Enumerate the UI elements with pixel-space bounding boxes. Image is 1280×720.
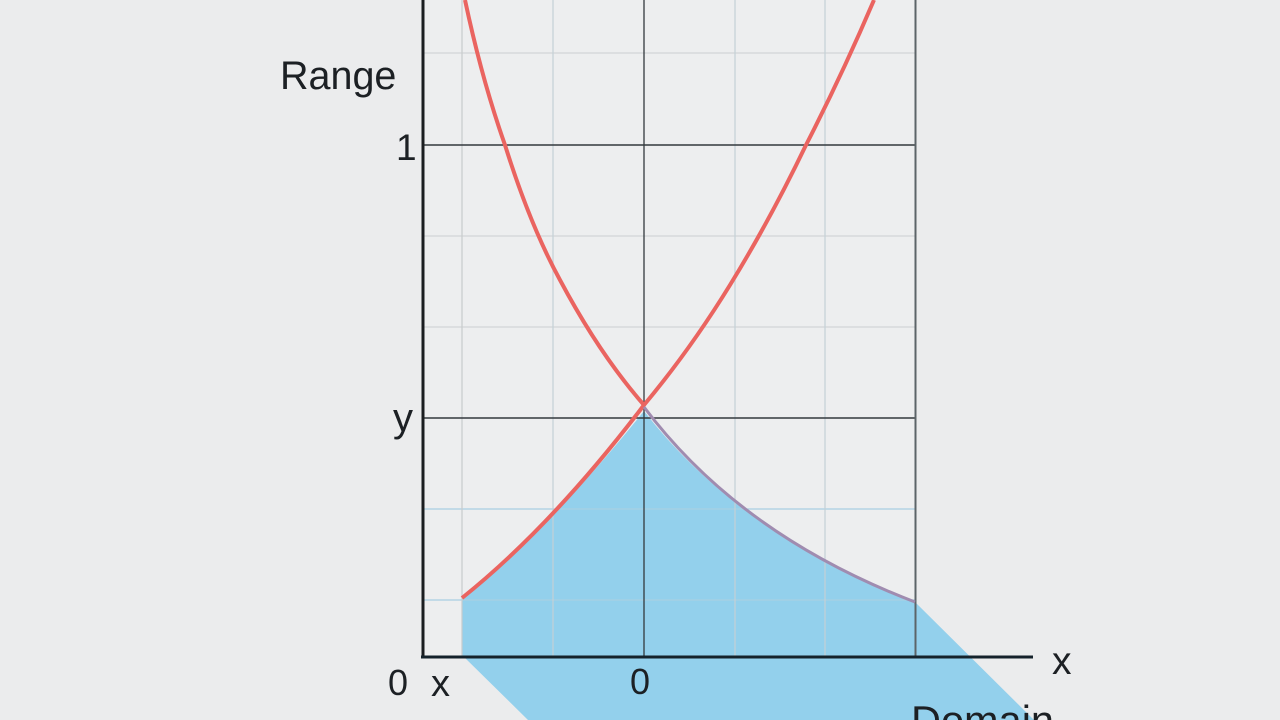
label: y: y <box>393 396 413 440</box>
panel: graph plot area <box>423 0 915 657</box>
red curve: ascending branch <box>462 0 874 598</box>
x axis <box>421 656 1033 658</box>
label: Range: Range <box>280 54 396 98</box>
shaded domain and range region <box>462 411 1034 720</box>
label: x at axis end: x <box>1052 640 1072 683</box>
lower right boundary curve <box>644 407 915 602</box>
y axis <box>422 0 424 658</box>
label: x at left: x <box>431 663 450 705</box>
label: 1: 1 <box>396 127 417 168</box>
red curve: descending branch <box>465 0 644 405</box>
label: 0 on x axis: 0 <box>630 661 650 702</box>
label: origin 0: 0 <box>388 662 408 703</box>
